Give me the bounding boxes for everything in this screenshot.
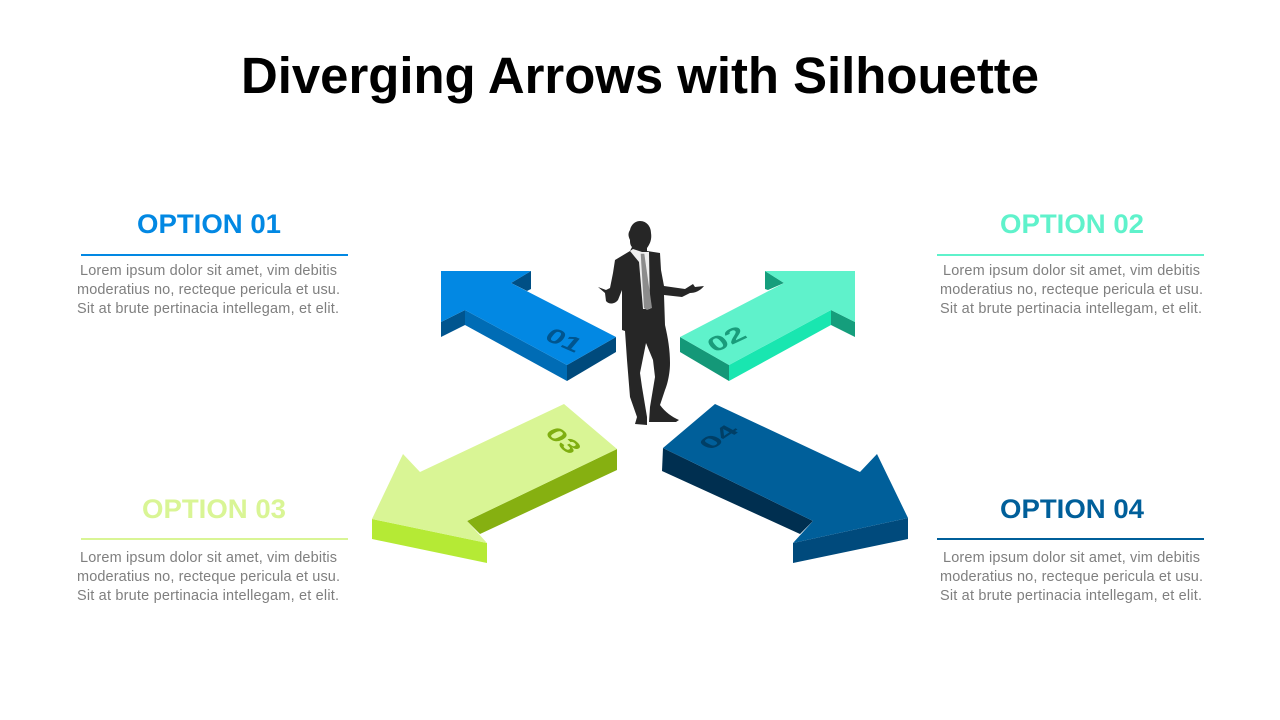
arrow: 04 <box>662 404 908 563</box>
panel: option 03 <box>77 494 348 604</box>
text block: option 02: Sit at brute pertinacia intellegam, et elit. <box>940 301 1202 317</box>
number: 04: 04 <box>693 421 745 453</box>
text block: option 02: moderatius no, recteque pericula et usu. <box>940 282 1203 298</box>
arrow: 01 <box>441 271 616 381</box>
icon: businessman silhouette <box>598 221 704 425</box>
heading: option 01: OPTION 01 <box>137 209 281 239</box>
panel: option 01 <box>77 209 348 317</box>
text block: option 01: Sit at brute pertinacia intellegam, et elit. <box>77 301 339 317</box>
text block: option 04: moderatius no, recteque pericula et usu. <box>940 569 1203 585</box>
text block: option 03: Lorem ipsum dolor sit amet, vim debitis <box>80 550 337 566</box>
number: 02: 02 <box>702 322 752 357</box>
panel: option 02 <box>937 209 1204 317</box>
heading: option 03: OPTION 03 <box>142 494 286 524</box>
divider: option 02 <box>937 254 1204 256</box>
text block: option 04: Lorem ipsum dolor sit amet, vim debitis <box>943 550 1200 566</box>
panel: option 04 <box>937 494 1204 604</box>
heading: option 04: OPTION 04 <box>1000 494 1144 524</box>
text block: option 02: Lorem ipsum dolor sit amet, vim debitis <box>943 263 1200 279</box>
text block: option 03: Sit at brute pertinacia intellegam, et elit. <box>77 588 339 604</box>
heading: option 02: OPTION 02 <box>1000 209 1144 239</box>
text block: option 04: Sit at brute pertinacia intellegam, et elit. <box>940 588 1202 604</box>
arrow: 02 <box>680 271 855 381</box>
text block: option 02 <box>940 263 1203 317</box>
number: 03: 03 <box>539 423 587 457</box>
number: 01: 01 <box>540 323 588 357</box>
divider: option 01 <box>81 254 348 256</box>
divider: option 04 <box>937 538 1204 540</box>
divider: option 03 <box>81 538 348 540</box>
tie <box>641 254 652 310</box>
text block: option 03: moderatius no, recteque pericula et usu. <box>77 569 340 585</box>
text block: option 03 <box>77 550 340 604</box>
text block: option 01: Lorem ipsum dolor sit amet, vim debitis <box>80 263 337 279</box>
title: Diverging Arrows with Silhouette <box>241 47 1039 104</box>
text block: option 04 <box>940 550 1203 604</box>
shirt <box>630 249 650 309</box>
text block: option 01: moderatius no, recteque pericula et usu. <box>77 282 340 298</box>
arrow: 03 <box>372 404 617 563</box>
text block: option 01 <box>77 263 340 317</box>
